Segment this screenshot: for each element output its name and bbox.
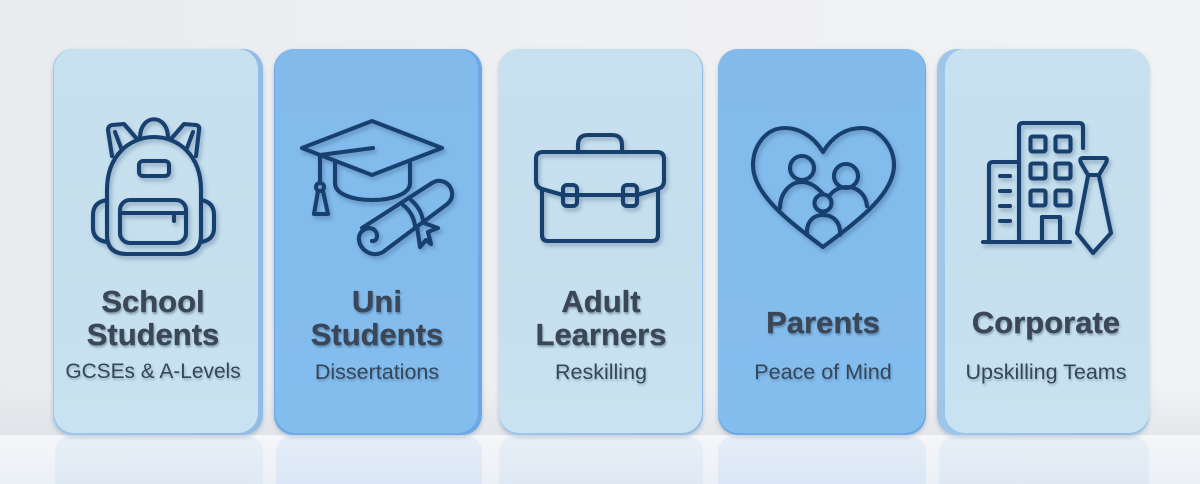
- icon: backpack: [90, 117, 220, 262]
- text: Peace of Mind: Peace of Mind: [754, 360, 892, 384]
- text: Dissertations: Dissertations: [315, 360, 439, 384]
- heading: School Students: School: [101, 284, 205, 319]
- icon: graduation cap and diploma: [300, 119, 458, 261]
- heading: Uni Students: Uni: [352, 284, 402, 319]
- panel: Corporate: [937, 49, 1149, 435]
- panel: Uni Students: [274, 49, 482, 435]
- panel: Adult Learners: [499, 49, 703, 435]
- panel: Parents: [718, 49, 926, 435]
- heading: Uni Students: [311, 284, 444, 352]
- text: Reskilling: Reskilling: [555, 360, 647, 384]
- heading: Uni Students: Students: [311, 317, 443, 352]
- heading: Adult Learners: Learners: [536, 317, 666, 352]
- heading: School Students: [87, 284, 220, 352]
- icon: heart with family: [750, 126, 900, 253]
- heading: Parents: Parents: [766, 305, 880, 340]
- panel: School Students: [53, 49, 263, 435]
- text: GCSEs and A-Levels: GCSEs & A-Levels: [65, 360, 241, 383]
- heading: Adult Learners: Adult: [561, 284, 641, 319]
- text: Upskilling Teams: Upskilling Teams: [966, 360, 1126, 384]
- heading: School Students: Students: [87, 317, 219, 352]
- heading: Adult Learners: [536, 284, 668, 352]
- icon: office building and tie: [980, 121, 1117, 260]
- heading: Corporate: Corporate: [972, 305, 1120, 340]
- icon: briefcase: [534, 133, 670, 248]
